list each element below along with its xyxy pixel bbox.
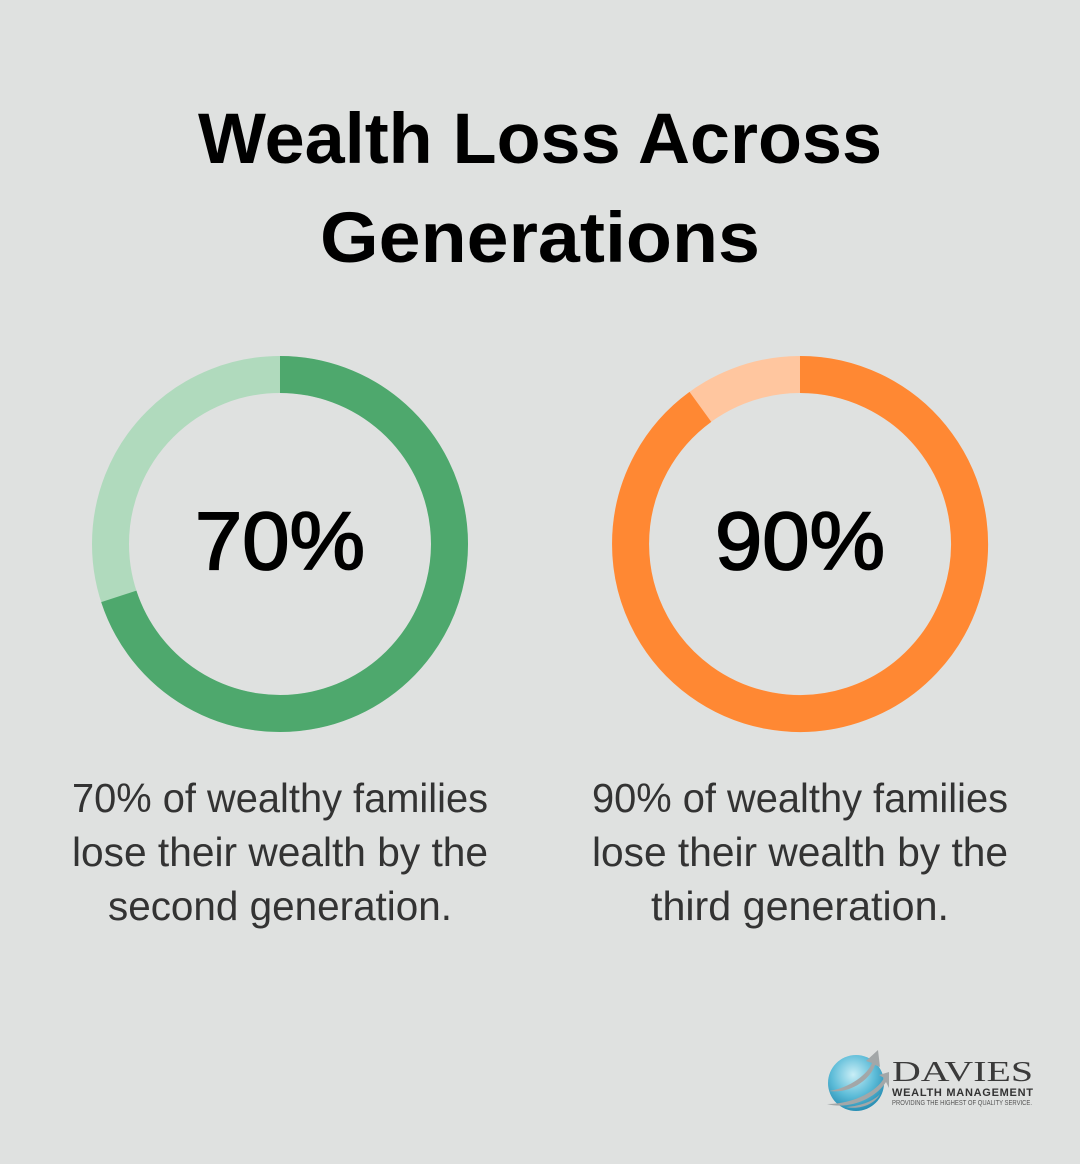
donut chart: 90 percent (630, 374, 970, 714)
panel: 90 percent (592, 374, 1008, 929)
logo subtitle: WEALTH MANAGEMENT (892, 1087, 1033, 1099)
description: 90 percent (592, 775, 1008, 929)
description: 70 percent: 70% of wealthy families (72, 775, 488, 821)
title: Generations (320, 199, 760, 278)
value: 90%: 90% (715, 496, 885, 587)
donut chart: 70 percent (110, 374, 450, 714)
value: 70%: 70% (195, 496, 365, 587)
description: 70 percent (72, 775, 488, 929)
panel: 70 percent (72, 374, 488, 929)
logo: Davies Wealth Management (827, 1050, 1033, 1111)
logo name: DAVIES (892, 1056, 1033, 1088)
description: 90 percent: 90% of wealthy families (592, 775, 1008, 821)
title: Wealth Loss Across (198, 100, 882, 179)
description: 90 percent: lose their wealth by the (592, 829, 1008, 875)
title (198, 100, 882, 278)
logo tagline: PROVIDING THE HIGHEST OF QUALITY SERVICE. (892, 1100, 1032, 1107)
description: 70 percent: lose their wealth by the (72, 829, 488, 875)
description: 90 percent: third generation. (651, 883, 949, 929)
description: 70 percent: second generation. (108, 883, 452, 929)
icon: globe with arrows (827, 1050, 889, 1111)
